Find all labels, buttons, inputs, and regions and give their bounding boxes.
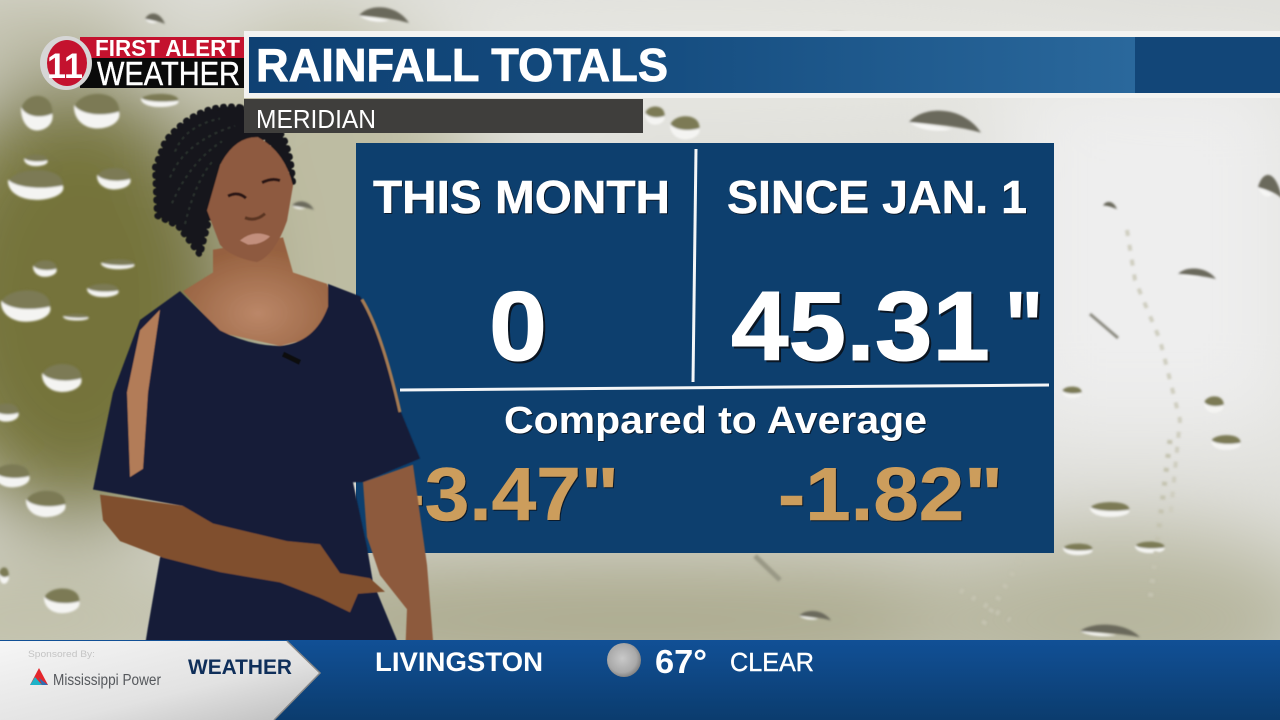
rainfall totals bbox=[489, 271, 1043, 381]
current conditions: 67° bbox=[655, 643, 707, 680]
title bar bbox=[244, 31, 1280, 98]
sleeve edge skin bbox=[362, 299, 400, 412]
column headings: SINCE JAN. 1 bbox=[727, 171, 1027, 223]
departure from average values bbox=[398, 452, 1003, 536]
station badge: 11 bbox=[47, 47, 83, 86]
title: RAINFALL TOTALS bbox=[256, 39, 668, 91]
sponsor panel: WEATHER bbox=[188, 656, 292, 679]
divider lines bbox=[400, 149, 1049, 390]
logo: First Alert Weather: FIRST ALERT bbox=[95, 35, 240, 61]
location bar bbox=[244, 99, 643, 134]
icon: sponsor logo bbox=[30, 668, 48, 685]
logo: First Alert Weather: WEATHER bbox=[97, 55, 240, 92]
comparison heading: Compared to Average bbox=[504, 400, 927, 442]
rainfall totals: 45.31 bbox=[731, 271, 990, 381]
location bar: MERIDIAN bbox=[256, 104, 376, 134]
neck and chest bbox=[183, 237, 333, 346]
presenter bbox=[93, 107, 433, 658]
rainfall totals: " bbox=[1005, 271, 1043, 381]
departure from average values: -3.47" bbox=[398, 452, 619, 536]
station badge bbox=[40, 36, 92, 90]
rainfall totals: 0 bbox=[489, 271, 547, 381]
dress bbox=[93, 284, 420, 658]
current conditions: LIVINGSTON bbox=[375, 647, 543, 677]
sponsor panel: Mississippi Power bbox=[53, 672, 161, 689]
microphone bbox=[283, 354, 300, 362]
column headings: THIS MONTH bbox=[373, 171, 670, 223]
hair bbox=[155, 107, 293, 255]
column headings bbox=[373, 171, 1027, 223]
facial features bbox=[228, 179, 280, 245]
current conditions: CLEAR bbox=[730, 647, 814, 677]
left arm and hand bbox=[100, 495, 385, 612]
sponsor panel bbox=[0, 641, 320, 720]
face bbox=[207, 137, 293, 262]
panel: rainfall data bbox=[356, 143, 1054, 553]
sleeve cut-out bbox=[127, 310, 160, 477]
right arm bbox=[363, 465, 433, 658]
departure from average values: -1.82" bbox=[778, 452, 1003, 536]
icon: moon bbox=[607, 643, 641, 677]
logo: First Alert Weather bbox=[40, 35, 244, 92]
ticker bbox=[0, 640, 1280, 720]
current conditions bbox=[375, 643, 814, 680]
sponsor panel: Sponsored By: bbox=[28, 649, 95, 660]
